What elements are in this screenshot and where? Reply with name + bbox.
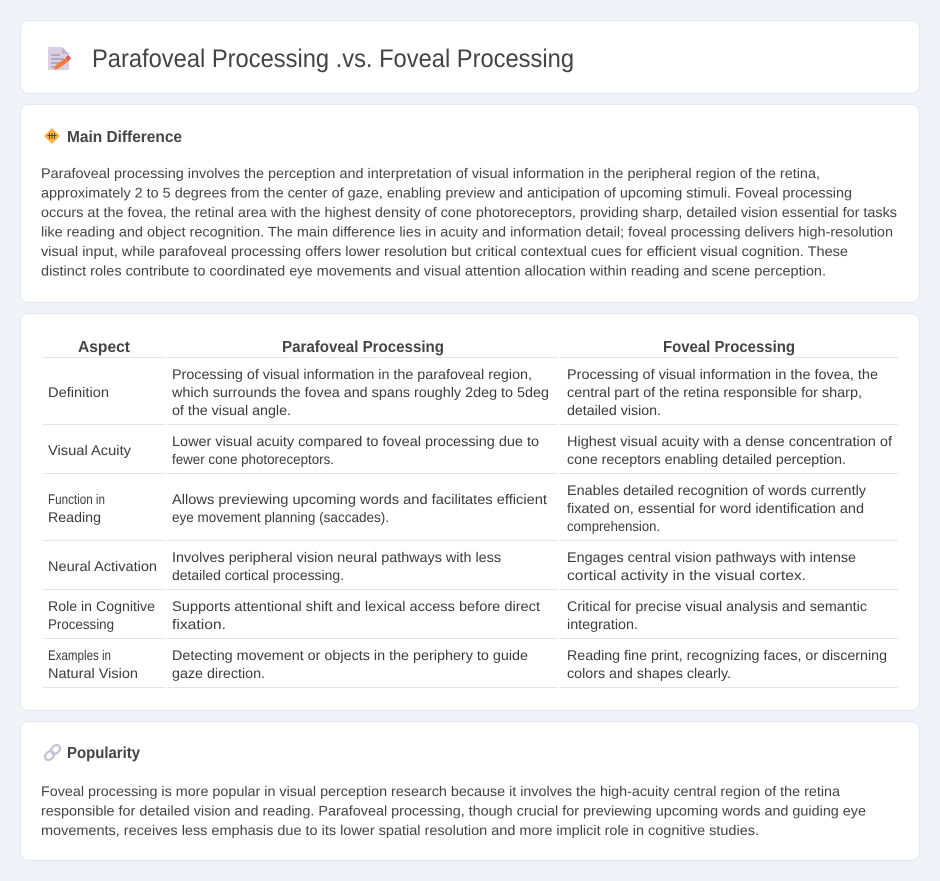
row: neural activation: detailed cortical processing. — [172, 567, 344, 583]
row: function in reading: Function in — [48, 491, 105, 507]
row: visual acuity — [48, 433, 892, 467]
row: role in cognitive processing — [48, 598, 867, 632]
row: neural activation: Neural Activation — [48, 558, 157, 574]
table header row — [78, 339, 795, 356]
row: examples in natural vision: gaze direction. — [172, 665, 265, 681]
paragraph: main difference: distinct roles contribute to coordinated eye movements and visual attention allocation within reading and scene perception. — [41, 262, 826, 278]
row: role in cognitive processing: Critical for precise visual analysis and semantic — [567, 598, 867, 614]
row: neural activation: cortical activity in the visual cortex. — [567, 567, 806, 583]
row: function in reading: comprehension. — [567, 518, 660, 534]
row: function in reading: eye movement planning (saccades). — [172, 509, 389, 525]
row: definition: of the visual angle. — [172, 402, 291, 418]
panel: header — [20, 20, 920, 94]
row: definition: Processing of visual information in the fovea, the — [567, 366, 878, 382]
heading: popularity: Popularity — [67, 745, 140, 762]
paragraph: popularity: Foveal processing is more popular in visual perception research because it involves the high-acuity central region of the retina — [41, 783, 840, 799]
table header row: Aspect — [78, 339, 131, 356]
row: definition: Definition — [48, 384, 109, 400]
paragraph: main difference: occurs at the fovea, the retinal area with the highest density of cone photoreceptors, providing sharp, detailed vision essential for tasks — [41, 204, 897, 220]
row: role in cognitive processing: Role in Cognitive — [48, 598, 155, 614]
panel: comparison table — [20, 314, 920, 710]
icon: orange diamond — [44, 128, 60, 144]
row: examples in natural vision: colors and shapes clearly. — [567, 665, 731, 681]
row: role in cognitive processing: Supports attentional shift and lexical access before direct — [172, 598, 540, 614]
row: visual acuity: cone receptors enabling detailed perception. — [567, 451, 846, 467]
row: examples in natural vision — [48, 647, 887, 681]
row: neural activation — [48, 549, 856, 583]
paragraph: main difference: approximately 2 to 5 degrees from the center of gaze, enabling preview and anticipation of upcoming stimuli. Foveal processing — [41, 184, 852, 200]
paragraph: popularity: responsible for detailed vision and reading. Parafoveal processing, though crucial for previewing upcoming words and guiding eye — [41, 802, 866, 818]
heading: main difference: Main Difference — [67, 129, 182, 146]
row: definition: Processing of visual information in the parafoveal region, — [172, 366, 532, 382]
title: Parafoveal Processing .vs. Foveal Processing — [92, 45, 574, 73]
paragraph: popularity: movements, receives less emphasis due to its lower spatial resolution and more implicit role in cognitive studies. — [41, 822, 759, 838]
row: role in cognitive processing: fixation. — [172, 616, 226, 632]
row: examples in natural vision: Natural Vision — [48, 665, 138, 681]
row: function in reading: Reading — [48, 509, 101, 525]
row: definition: central part of the retina responsible for sharp, — [567, 384, 862, 400]
table header row: Foveal Processing — [663, 339, 795, 356]
row: definition — [48, 366, 878, 418]
row: definition: which surrounds the fovea and spans roughly 2deg to 5deg — [171, 384, 549, 400]
row: visual acuity: Highest visual acuity with a dense concentration of — [567, 433, 892, 449]
panel: main difference — [20, 104, 920, 302]
icon: link — [43, 743, 62, 762]
row: visual acuity: Visual Acuity — [48, 442, 131, 458]
row: role in cognitive processing: Processing — [48, 616, 114, 632]
icon: memo with pencil — [48, 47, 71, 70]
row: examples in natural vision: Examples in — [48, 647, 111, 663]
row: function in reading: Enables detailed recognition of words currently — [567, 482, 866, 498]
row: function in reading: fixated on, essential for word identification and — [567, 500, 864, 516]
paragraph: popularity — [41, 783, 866, 838]
paragraph: main difference — [41, 165, 897, 278]
row: visual acuity: fewer cone photoreceptors. — [172, 451, 334, 467]
panel: popularity — [20, 722, 920, 860]
paragraph: main difference: visual input, while parafoveal processing offers lower resolution but critical contextual cues for efficient visual cognition. These — [41, 243, 848, 259]
row: function in reading — [48, 482, 866, 534]
table header row: Parafoveal Processing — [282, 339, 444, 356]
row: definition: detailed vision. — [567, 402, 661, 418]
row: role in cognitive processing: integration. — [567, 616, 638, 632]
row: examples in natural vision: Detecting movement or objects in the periphery to guide — [172, 647, 528, 663]
row: function in reading: Allows previewing upcoming words and facilitates efficient — [172, 491, 547, 507]
paragraph: main difference: like reading and object recognition. The main difference lies in acuity and information detail; foveal processing delivers high-resolution — [41, 224, 893, 240]
row: neural activation: Engages central vision pathways with intense — [567, 549, 856, 565]
row: visual acuity: Lower visual acuity compared to foveal processing due to — [172, 433, 539, 449]
row: examples in natural vision: Reading fine print, recognizing faces, or discerning — [567, 647, 887, 663]
paragraph: main difference: Parafoveal processing involves the perception and interpretation of visual information in the peripheral region of the retina, — [41, 165, 820, 181]
row: neural activation: Involves peripheral vision neural pathways with less — [172, 549, 501, 565]
